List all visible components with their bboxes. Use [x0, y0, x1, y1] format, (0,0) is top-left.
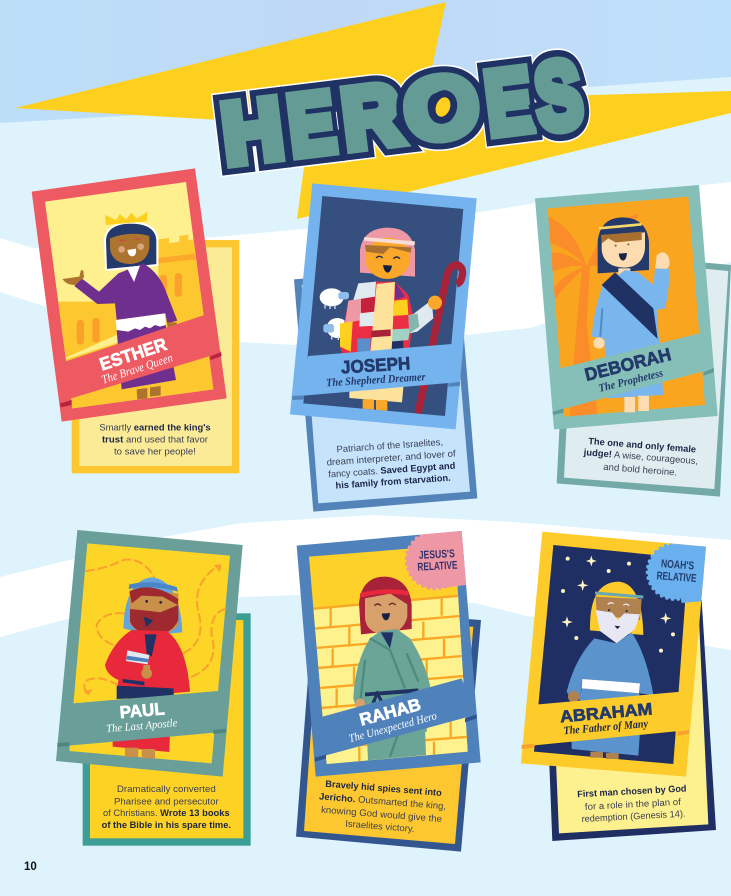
title: HEROES: HEROES [230, 66, 578, 164]
title: HEROES: S [530, 41, 588, 151]
description text: judge! A wise, courageous, [582, 447, 698, 466]
banner: Abraham name [522, 692, 689, 749]
character: Paul [105, 577, 190, 758]
dashed journey routes [84, 560, 225, 692]
panel: Joseph [290, 183, 477, 512]
banner: Abraham name: ABRAHAM [559, 699, 653, 726]
description text: Israelites victory. [345, 819, 415, 834]
banner: Rahab name: The Unexpected Hero [348, 710, 439, 745]
banner: Paul name: PAUL [119, 698, 166, 722]
front card: Joseph [290, 183, 477, 429]
title: HEROES: E [480, 49, 538, 154]
badge: Noah's relative: NOAH'S [660, 558, 695, 573]
description text: fancy coats. Saved Egypt and [328, 461, 456, 479]
banner: Esther name: ESTHER [97, 334, 169, 375]
front card: Paul [56, 530, 243, 777]
description text [99, 422, 211, 456]
description text: to save her people! [114, 446, 196, 456]
night stars [561, 556, 675, 653]
front card: Esther [32, 168, 227, 422]
title: HEROES: O [399, 56, 484, 161]
back card: Abraham description [543, 600, 716, 841]
description text: The one and only female [588, 436, 696, 455]
yellow lightning burst [15, 2, 731, 219]
character: Abraham [567, 582, 653, 759]
banner: Paul name [57, 691, 226, 747]
banner: Esther name: The Brave Queen [100, 350, 174, 387]
front card: Rahab [297, 528, 481, 777]
panel: Rahab [296, 528, 481, 852]
title: HEROES: E [480, 49, 538, 154]
title: HEROES: E [480, 49, 538, 154]
icon: shepherd's staff [418, 265, 463, 413]
title: HEROES: H [217, 79, 288, 182]
banner: Esther name [60, 315, 222, 407]
title: HEROES: S [530, 41, 588, 151]
palace scenery [53, 235, 220, 413]
description text: and bold heroine. [603, 462, 678, 478]
panel: Esther [32, 168, 239, 473]
description text: Jericho. Outsmarted the king, [319, 791, 446, 811]
title: HEROES: O [399, 56, 484, 161]
banner: Joseph name: The Shepherd Dreamer [326, 371, 426, 389]
back card: Rahab description [296, 608, 481, 852]
banner: Joseph name: JOSEPH [340, 353, 411, 377]
description text: trust and used that favor [102, 434, 208, 444]
brick wall [310, 596, 477, 768]
panel: Paul [56, 530, 251, 846]
character: Joseph [340, 228, 433, 412]
arrowheads on routes [83, 564, 222, 696]
description text: dream interpreter, and lover of [326, 448, 456, 468]
title: HEROES: R [337, 65, 407, 168]
banner: Paul name: The Last Apostle [106, 717, 178, 735]
description text [582, 436, 698, 478]
badge: Noah's relative [648, 540, 708, 603]
back card: Esther description [72, 240, 239, 473]
description text [319, 779, 446, 834]
back card: Deborah description [557, 250, 731, 497]
panel: Abraham [521, 532, 716, 841]
badge: Jesus's relative: JESUS'S [419, 548, 455, 562]
badge: Jesus's relative [407, 528, 470, 588]
description text [326, 437, 456, 491]
banner: Deborah name: The Prophetess [597, 367, 665, 395]
title: HEROES: E [283, 74, 340, 175]
page number: 10 [24, 861, 37, 873]
description text: for a role in the plan of [585, 797, 681, 812]
character: Esther [62, 212, 177, 399]
badge: Jesus's relative: RELATIVE [417, 560, 458, 574]
front card: Abraham [521, 532, 708, 777]
character: Deborah [592, 217, 670, 412]
description text [102, 784, 231, 830]
title: HEROES [216, 41, 588, 190]
title: HEROES: E [283, 74, 340, 175]
description text: of Christians. Wrote 13 books [103, 808, 230, 818]
description text: Dramatically converted [117, 784, 216, 794]
title: HEROES: R [337, 65, 407, 168]
description text: Pharisee and persecutor [114, 796, 219, 806]
title: HEROES: H [217, 79, 288, 182]
palm tree [548, 213, 638, 418]
banner: Abraham name: The Father of Many [563, 718, 649, 737]
title: HEROES: R [337, 65, 407, 168]
sheep [320, 288, 349, 340]
banner: Deborah name [553, 333, 714, 415]
description text: his family from starvation. [335, 473, 451, 491]
description text: Bravely hid spies sent into [325, 779, 442, 798]
description text [577, 783, 687, 824]
description text: First man chosen by God [577, 783, 687, 799]
back card: Paul description [83, 613, 251, 846]
description text: redemption (Genesis 14). [581, 809, 686, 824]
title: HEROES: S [530, 41, 588, 151]
banner: Rahab name: RAHAB [357, 694, 423, 730]
description text: of the Bible in his spare time. [102, 820, 231, 830]
banner: Rahab name [315, 678, 477, 762]
back card: Joseph description [294, 266, 477, 512]
title: HEROES: O [399, 56, 484, 161]
banner: Joseph name [292, 344, 460, 400]
banner: Deborah name: DEBORAH [583, 344, 673, 385]
title: HEROES: E [283, 74, 340, 175]
panel: Deborah [535, 185, 731, 497]
title: HEROES: H [217, 79, 288, 182]
description text: knowing God would give the [321, 805, 442, 824]
front card: Deborah [535, 185, 718, 429]
description text: Smartly earned the king's [99, 422, 211, 432]
character: Rahab [353, 577, 430, 760]
badge: Noah's relative: RELATIVE [656, 570, 697, 585]
description text: Patriarch of the Israelites, [336, 437, 443, 454]
